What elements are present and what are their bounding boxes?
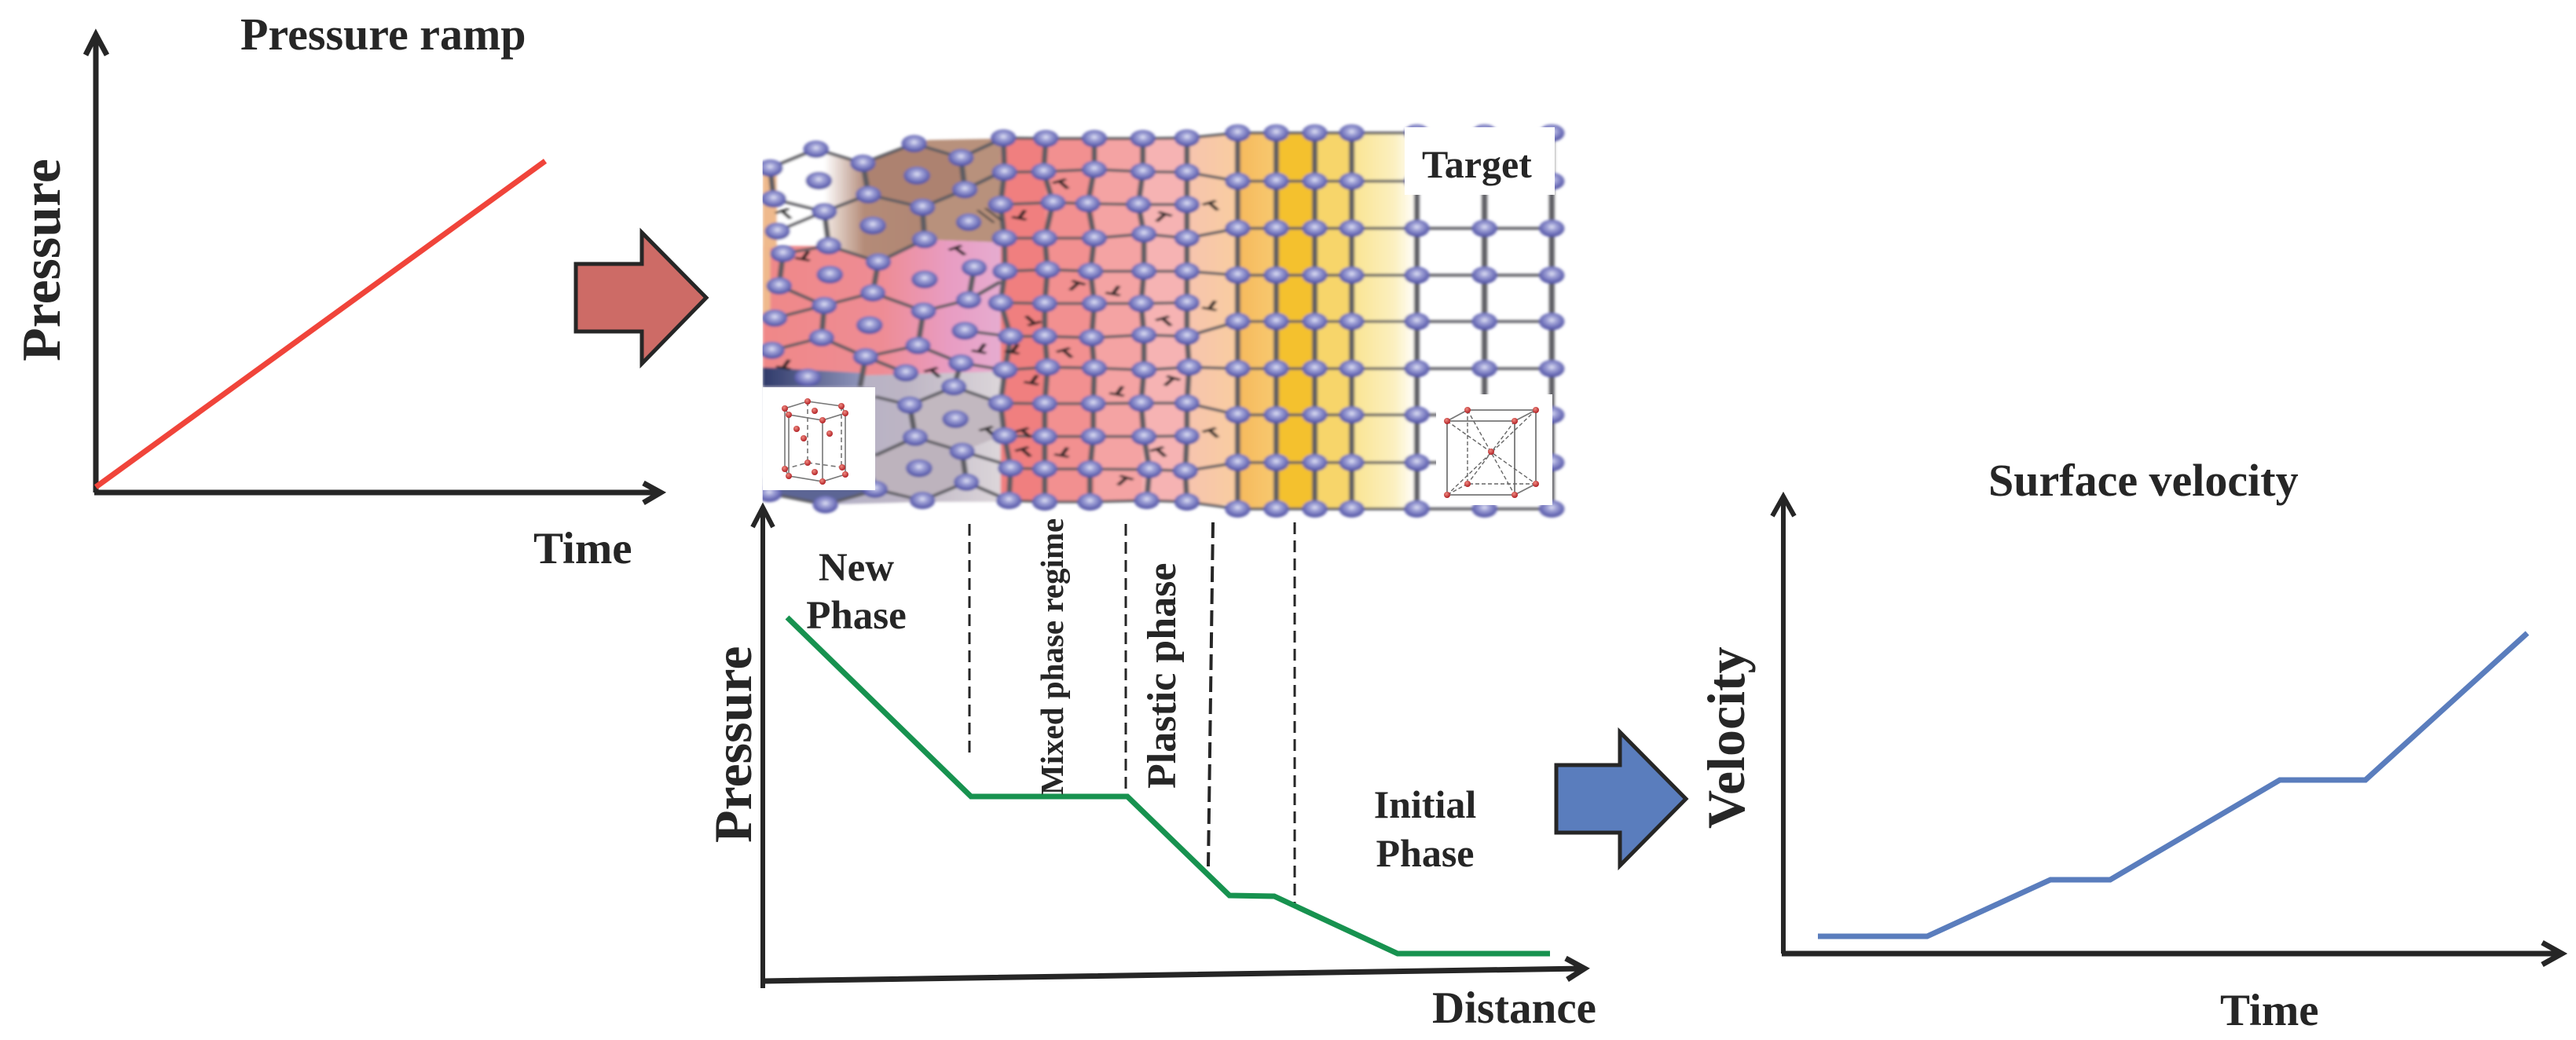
label: initial phase	[1374, 782, 1476, 875]
y axis label: Velocity	[1696, 646, 1756, 829]
right grid	[1237, 133, 1552, 509]
phase boundary dashed lines	[969, 522, 1295, 903]
panel: target lattice illustration	[703, 124, 2562, 1035]
y axis with arrow	[86, 35, 107, 493]
lattice artwork	[757, 124, 1564, 518]
y axis with arrow	[1772, 496, 1794, 954]
label: new phase: Phase	[806, 594, 907, 638]
x axis label: Distance	[1432, 983, 1596, 1033]
x axis with arrow	[1782, 943, 2562, 965]
y axis label: Pressure	[703, 646, 763, 843]
label box: Target	[1405, 127, 1555, 195]
label box: Target: Target	[1422, 142, 1532, 186]
label: new phase	[806, 546, 907, 638]
blue velocity line	[1818, 633, 2527, 936]
red region columns	[1001, 138, 1010, 500]
heading: pressure ramp: Pressure ramp	[240, 9, 526, 60]
red region rows	[1003, 133, 1237, 138]
green pressure profile	[787, 617, 1550, 954]
panel: surface velocity chart	[1696, 455, 2562, 1035]
arrow: red arrow to target	[576, 233, 706, 364]
x axis label: Time	[2220, 986, 2319, 1035]
inset: body-centred unit cell	[1436, 394, 1552, 505]
arrow: blue arrow to surface velocity	[1556, 732, 1686, 866]
dislocation marks	[775, 179, 1225, 487]
label: mixed phase regime: Mixed phase regime	[1034, 518, 1070, 795]
inset: hexagonal unit cell	[763, 387, 875, 490]
x axis with arrow	[763, 958, 1585, 981]
y axis label: Pressure	[12, 159, 72, 361]
atoms	[757, 124, 1564, 518]
panel: pressure versus distance chart	[703, 507, 1596, 1033]
label: plastic phase: Plastic phase	[1140, 563, 1185, 789]
heading: surface velocity: Surface velocity	[1988, 455, 2299, 506]
label: initial phase: Phase	[1376, 831, 1474, 875]
lattice bonds	[769, 133, 1552, 509]
panel: pressure ramp chart	[12, 9, 661, 573]
label: new phase: New	[819, 546, 894, 590]
x axis with arrow	[94, 483, 661, 503]
y axis with arrow	[753, 507, 773, 988]
x axis label: Time	[533, 524, 632, 573]
red pressure ramp line	[96, 161, 545, 487]
label: initial phase: Initial	[1374, 782, 1476, 826]
